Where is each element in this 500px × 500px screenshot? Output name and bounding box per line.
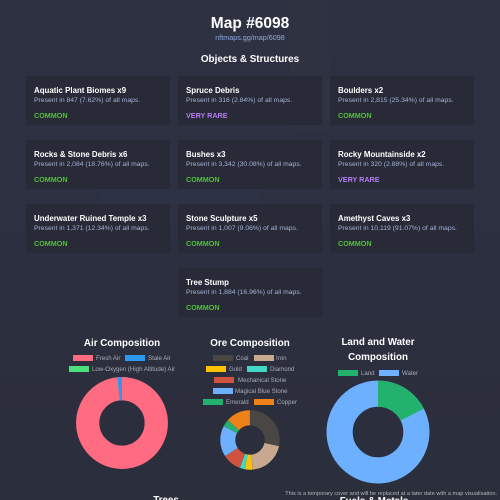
legend: air composition (69, 354, 175, 372)
card: stone sculpture: COMMON (186, 239, 220, 248)
map link: nftmaps.gg/map/6098 (215, 33, 285, 42)
legend: air composition: Low-Oxygen (High Altitude) Air (92, 366, 175, 372)
legend: land and water: Water (402, 370, 418, 376)
card: aquatic plant biomes (26, 76, 170, 125)
card: rocky mountainside: Present in 320 (2.88%) of all maps. (338, 161, 444, 168)
card: tree stump (178, 268, 322, 317)
card: aquatic plant biomes: COMMON (34, 111, 68, 120)
card: stone sculpture: Present in 1,007 (9.06%) of all maps. (186, 225, 298, 232)
heading: air composition: Air Composition (84, 338, 160, 349)
chart: ore composition donut (220, 410, 280, 470)
card: underwater ruined temple: Underwater Ruined Temple x3 (34, 214, 147, 222)
card: rocky mountainside (330, 140, 474, 189)
card: rocks and stone debris (26, 140, 170, 189)
card: underwater ruined temple (26, 204, 170, 253)
chart: air composition donut (76, 377, 168, 469)
card: boulders: COMMON (338, 111, 372, 120)
card: stone sculpture (178, 204, 322, 253)
legend: air composition: Fresh Air (96, 354, 120, 362)
card: rocks and stone debris: Rocks & Stone Debris x6 (34, 150, 127, 158)
footer note: This is a temporary cover and will be replaced at a later date with a map visualisation. (285, 491, 497, 497)
card: amethyst caves: COMMON (338, 239, 372, 248)
legend: ore composition: Copper (277, 398, 297, 406)
card: bushes: Present in 3,342 (30.08%) of all maps. (186, 161, 302, 168)
card: underwater ruined temple: COMMON (34, 239, 68, 248)
card: rocks and stone debris: COMMON (34, 175, 68, 184)
heading: land and water composition (341, 337, 415, 362)
card: spruce debris (178, 76, 322, 125)
card: amethyst caves: Present in 10,119 (91.07%) of all maps. (338, 225, 457, 232)
legend: ore composition: Magical Blue Stone (235, 388, 288, 394)
card: rocky mountainside: Rocky Mountainside x2 (338, 150, 426, 158)
legend: ore composition: Emerald (226, 398, 249, 406)
legend: ore composition: Mechanical Stone (238, 376, 286, 384)
legend: ore composition: Coal (236, 354, 249, 362)
card: boulders: Present in 2,815 (25.34%) of all maps. (338, 97, 454, 104)
card: amethyst caves (330, 204, 474, 253)
legend: land and water: Land (361, 370, 375, 376)
legend: ore composition: Iron (276, 354, 287, 362)
title: Map #6098 (211, 15, 289, 32)
legend: land and water (338, 370, 418, 376)
heading: land and water composition: Land and Water (341, 337, 415, 348)
card: tree stump: COMMON (186, 303, 220, 312)
card: bushes: COMMON (186, 175, 220, 184)
card: rocks and stone debris: Present in 2,084 (18.76%) of all maps. (34, 161, 150, 168)
card: boulders (330, 76, 474, 125)
legend: air composition: Stale Air (148, 354, 171, 362)
card: rocky mountainside: VERY RARE (338, 175, 380, 184)
card: underwater ruined temple: Present in 1,371 (12.34%) of all maps. (34, 225, 150, 232)
card: spruce debris: Present in 316 (2.84%) of all maps. (186, 97, 292, 104)
heading: land and water composition: Composition (348, 352, 408, 362)
card: aquatic plant biomes: Present in 847 (7.62%) of all maps. (34, 97, 140, 104)
card: aquatic plant biomes: Aquatic Plant Biomes x9 (34, 86, 126, 94)
heading: ore composition: Ore Composition (210, 338, 290, 349)
card: boulders: Boulders x2 (338, 86, 383, 94)
card: amethyst caves: Amethyst Caves x3 (338, 214, 410, 222)
card: spruce debris: Spruce Debris (186, 86, 240, 94)
card: stone sculpture: Stone Sculpture x5 (186, 214, 257, 222)
heading: objects and structures: Objects & Structures (201, 54, 299, 65)
card: tree stump: Tree Stump (186, 278, 229, 286)
card: spruce debris: VERY RARE (186, 111, 228, 120)
legend: ore composition (203, 354, 297, 406)
legend: ore composition: Diamond (270, 366, 294, 372)
card: tree stump: Present in 1,884 (16.96%) of all maps. (186, 289, 302, 296)
card: bushes (178, 140, 322, 189)
chart: land and water donut (326, 380, 430, 484)
card: bushes: Bushes x3 (186, 150, 225, 158)
legend: ore composition: Gold (229, 366, 242, 372)
